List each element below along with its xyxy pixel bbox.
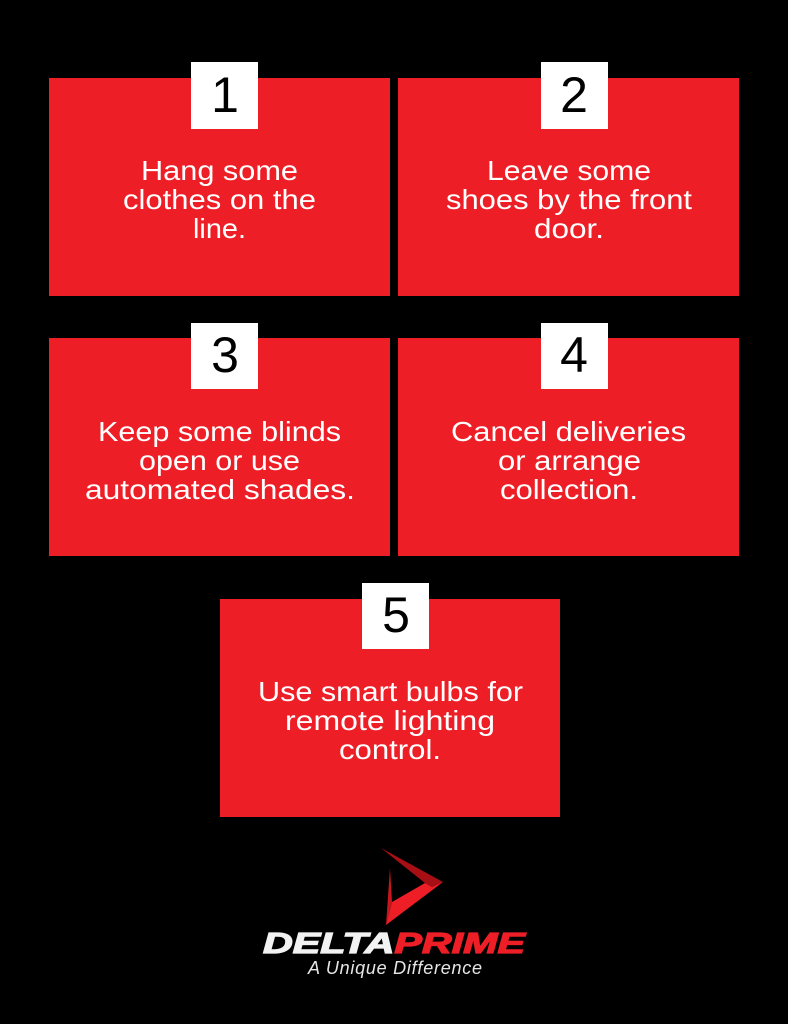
panel: tip 2: shoes by the front <box>446 184 692 215</box>
panel: tip 5 <box>220 583 560 817</box>
panel: tip 5: 5 <box>382 587 410 643</box>
panel: tip 4: Cancel deliveries <box>451 416 686 447</box>
panel: tip 1: clothes on the <box>123 184 316 215</box>
panel: tip 2: 2 <box>560 67 588 123</box>
panel: tip 4: collection. <box>500 474 638 505</box>
panel: tip 5: control. <box>339 734 441 765</box>
tagline: A Unique Difference <box>307 958 482 978</box>
panel: tip 5: remote lighting <box>285 705 495 736</box>
panel: tip 3: 3 <box>211 327 239 383</box>
panel: tip 1: 1 <box>211 67 239 123</box>
panel: tip 4: or arrange <box>498 445 641 476</box>
panel: tip 2: door. <box>534 213 604 244</box>
panel: tip 1 <box>49 62 390 296</box>
panel: tip 2: Leave some <box>487 155 651 186</box>
panel: tip 3: Keep some blinds <box>98 416 341 447</box>
panel: tip 5: Use smart bulbs for <box>258 676 523 707</box>
panel: tip 3 <box>49 323 390 556</box>
icon: delta arrow <box>381 848 443 925</box>
logo: Delta Prime <box>263 848 527 978</box>
panel: tip 1: Hang some <box>141 155 298 186</box>
panel: tip 4: 4 <box>560 327 588 383</box>
wordmark: DELTA PRIME <box>263 928 527 960</box>
panel: tip 3: open or use <box>139 445 300 476</box>
panel: tip 3: automated shades. <box>85 474 355 505</box>
panel: tip 2 <box>398 62 739 296</box>
panel: tip 4 <box>398 323 739 556</box>
panel: tip 1: line. <box>193 213 246 244</box>
